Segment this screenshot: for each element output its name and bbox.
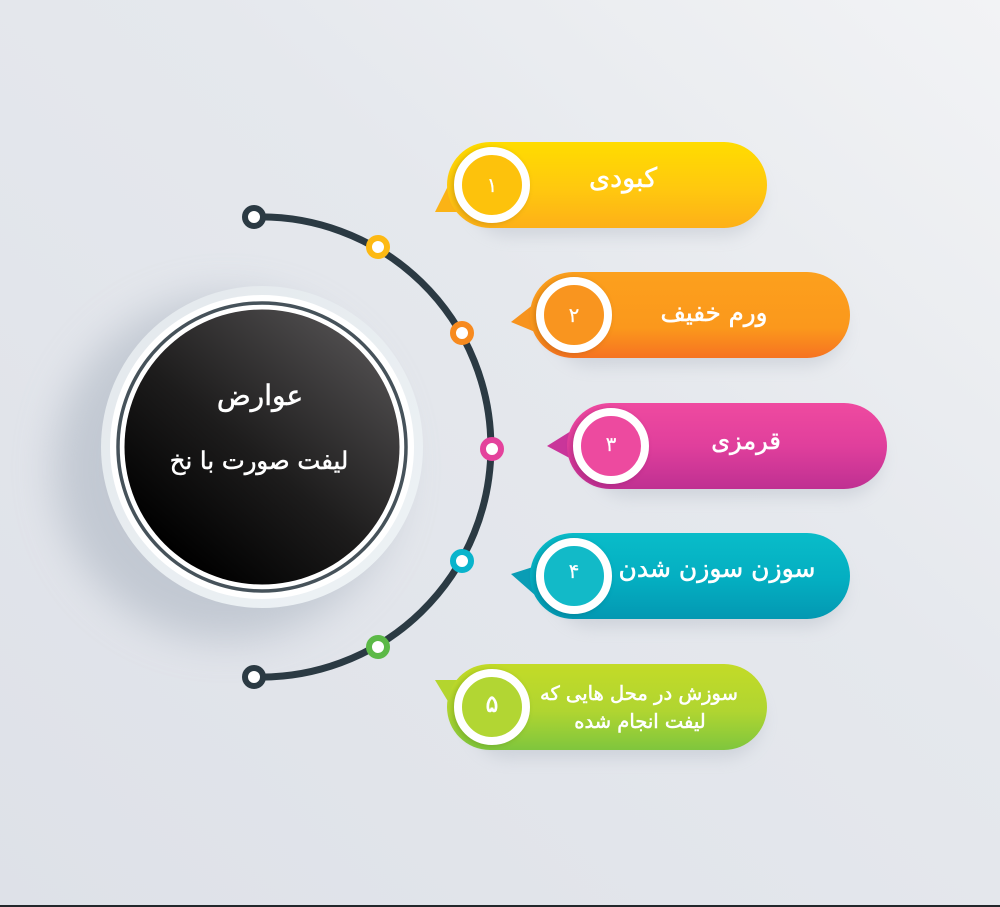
label 5 bbox=[540, 682, 738, 733]
label 3: قرمزی bbox=[711, 427, 781, 455]
item 1: yellow pill bbox=[435, 142, 767, 236]
arc start node bbox=[245, 208, 263, 226]
label 4: سوزن سوزن شدن bbox=[619, 554, 815, 583]
central disc bbox=[54, 286, 423, 640]
central title: عوارض bbox=[217, 379, 303, 412]
arc node 4 bbox=[453, 552, 471, 570]
arc node 2 bbox=[453, 324, 471, 342]
item 5: green pill bbox=[435, 664, 767, 758]
central subtitle: لیفت صورت با نخ bbox=[170, 446, 348, 475]
arc node 5 bbox=[369, 638, 387, 656]
label 2: ورم خفیف bbox=[661, 298, 767, 327]
number 5: ۵ bbox=[486, 690, 498, 718]
item 2: orange pill bbox=[511, 272, 850, 366]
arc end node bbox=[245, 668, 263, 686]
number 1: ۱ bbox=[487, 173, 497, 197]
arc node 1 bbox=[369, 238, 387, 256]
arc node 3 bbox=[483, 440, 501, 458]
number 4: ۴ bbox=[569, 559, 579, 583]
number 3: ۳ bbox=[606, 432, 617, 456]
timeline arc bbox=[254, 217, 491, 677]
label 5: سوزش در محل هایی که bbox=[540, 682, 738, 705]
item 3: magenta pill bbox=[547, 403, 887, 497]
item 4: teal pill bbox=[511, 533, 850, 627]
label 1: کبودی bbox=[589, 163, 657, 194]
label 5: لیفت انجام شده bbox=[574, 710, 706, 733]
number 2: ۲ bbox=[569, 303, 579, 327]
